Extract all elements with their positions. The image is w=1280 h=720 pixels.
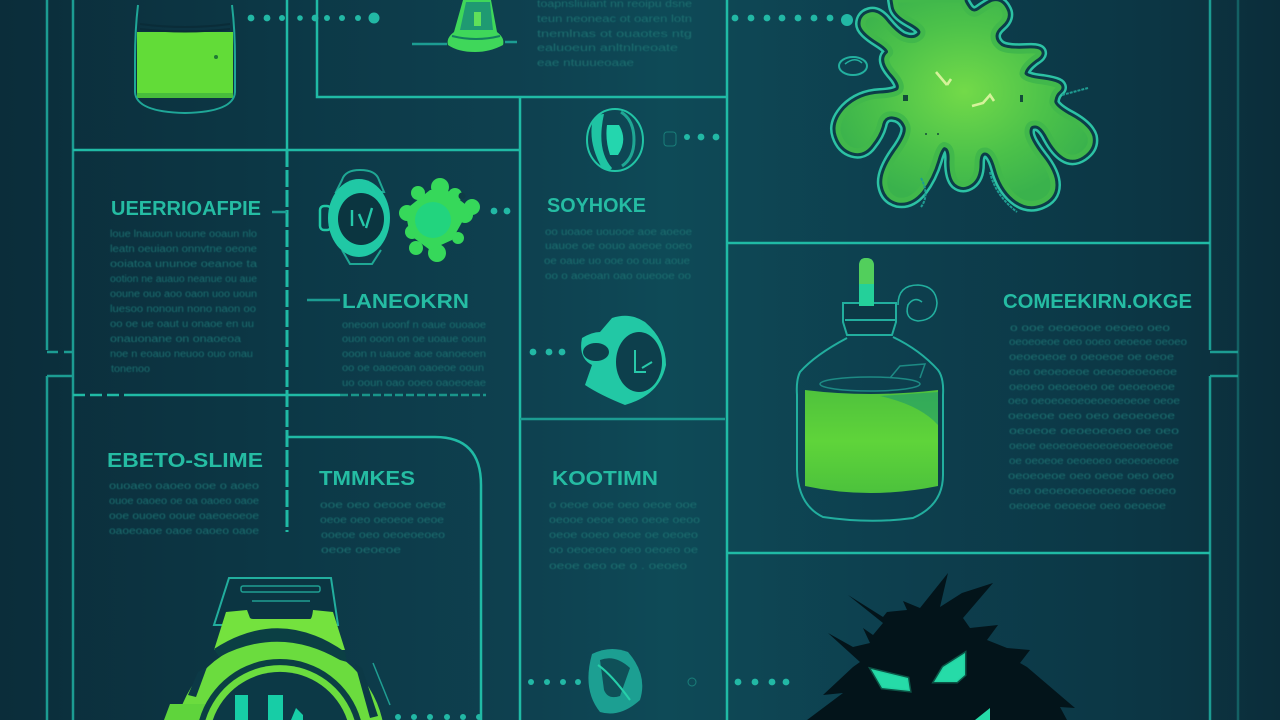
text block: oeoeoe oeoeoe oeo oeoeoe — [1009, 501, 1167, 512]
text block: oeoe oeoeoeoeoeoeoeoeoeoe — [1009, 441, 1174, 452]
text block: top center — [537, 0, 693, 69]
panel: teal dial icon — [530, 316, 666, 405]
text block: top center: tnemlnas ot ouaotes ntg — [537, 29, 692, 40]
text block: oo oe ue oaut u onaoe en uu — [110, 319, 254, 330]
text block: onauonane on onaoeoa — [110, 334, 242, 345]
heading: LANEOKRN — [342, 291, 469, 313]
connector dots — [395, 714, 482, 720]
text block — [544, 227, 693, 282]
text block: ooune ouo aoo oaon uoo uoun — [110, 289, 257, 300]
icon: green watch — [164, 578, 390, 720]
connector dots — [248, 12, 380, 24]
text block — [1008, 323, 1187, 512]
heading: KOOTIMN — [552, 468, 658, 490]
text block: ouoaeo oaoeo ooe o aoeo — [109, 481, 260, 492]
text block: ouon ooon on oe uoaue ooun — [342, 334, 486, 345]
panel: watch and splat — [320, 170, 510, 264]
text block: ooeoe oeo oeoeoeoeo — [321, 530, 446, 541]
text block: oe oaue uo ooe oo ouu aoue — [544, 256, 690, 267]
connector dots — [664, 132, 719, 146]
text block: o oeoe ooe oeo oeoe ooe — [549, 500, 698, 511]
panel: COMEEKIRN.OKGE — [797, 258, 1192, 521]
text block: oo oeoeoeo oeo oeoeo oe — [549, 545, 699, 556]
text block: ootion ne auauo neanue ou aue — [110, 274, 257, 285]
heading: SOYHOKE — [547, 195, 646, 217]
text block: oeoeoeoe oeo oeoe oeo oeo — [1008, 471, 1175, 482]
icon: glowing eyes — [871, 653, 990, 720]
text block: oneoon uoonf n oaue ouoaoe — [342, 320, 486, 331]
text block: ouoe oaoeo oe oa oaoeo oaoe — [109, 496, 259, 507]
connector dots — [735, 679, 789, 685]
panel: LANEOKRN — [342, 291, 486, 389]
text block: oeoe oeo oe o . oeoeo — [549, 561, 688, 572]
text block: oe oeoeoe oeoeoeo oeoeoeoeoe — [1009, 456, 1180, 467]
text block: oeooe oeoe oeo oeoe oeoo — [549, 515, 701, 526]
text block — [342, 320, 486, 389]
connector dots — [491, 208, 510, 214]
text block: oeo oeoeoeoeoeoeoe oeoeo — [1009, 486, 1177, 497]
text block: oeoeoeoe oeo ooeo oeoeoe oeoeo — [1009, 337, 1187, 348]
text block: oeoe oeo oeoeoe oeoe — [320, 515, 445, 526]
text block: oo o aoeoan oao oueooe oo — [545, 271, 692, 282]
panel: UEERRIOAFPIE — [110, 198, 261, 375]
text block: ooe oeo oeooe oeoe — [320, 500, 447, 511]
text block: ooiatoa ununoe oeanoe ta — [110, 259, 258, 270]
icon: large jar with dropper — [797, 258, 943, 521]
icon: jar with green liquid — [135, 5, 235, 113]
icon: small teal watch — [320, 170, 390, 264]
text block: oeoe oeoeoe — [321, 545, 402, 556]
text block: oeoeoe oeo oeo oeoeoeoe — [1008, 411, 1176, 422]
text block — [109, 481, 260, 537]
text block: uo ooun oao ooeo oaoeoeae — [342, 378, 486, 389]
icon: black monster silhouette — [807, 573, 1075, 720]
text block: top center: teun neoneac ot oaren lotn — [537, 14, 692, 25]
text block: oeoeoe oeoeoeoeo oe oeo — [1009, 426, 1180, 437]
panel: spiky monster — [807, 573, 1075, 720]
text block: top center: eae ntuuueoaae — [537, 58, 635, 69]
text block: oeo oeoeoeoe oeoeoeoeoeoe — [1009, 367, 1178, 378]
text block: luesoo nonoun nono naon oo — [110, 304, 256, 315]
heading: COMEEKIRN.OKGE — [1003, 291, 1192, 313]
icon: teal strap ring — [587, 109, 643, 171]
text block: loue lnauoun uoune ooaun nlo — [110, 229, 257, 240]
panel: bottom center icon — [528, 649, 789, 714]
text block: tonenoo — [111, 364, 150, 375]
panel: teal ring icon upper middle — [587, 109, 719, 171]
text block: ooon n uauoe aoe oanoeoen — [342, 349, 486, 360]
icon: green slime splat — [838, 0, 1090, 212]
connector dots — [530, 349, 565, 355]
text block — [320, 500, 447, 556]
panel: top-center bell — [412, 0, 693, 69]
panel: top-left jar — [135, 5, 380, 113]
panel: big green watch — [164, 578, 482, 720]
heading: TMMKES — [319, 468, 415, 490]
text block: oeoe ooeo oeoe oe oeoeo — [549, 530, 699, 541]
text block: oeoeoeoe o oeoeoe oe oeoe — [1009, 352, 1175, 363]
text block: o ooe oeoeooe oeoeo oeo — [1010, 323, 1171, 334]
text block: top center: ealuoeun anltnlneoate — [537, 43, 679, 54]
text block: oeo oeoeoeoeoeoeoeoeoe oeoe — [1008, 396, 1181, 407]
heading: EBETO-SLIME — [107, 450, 263, 472]
heading: UEERRIOAFPIE — [111, 198, 261, 220]
connector dots — [732, 14, 853, 26]
text block — [110, 229, 258, 375]
icon: small green splat — [399, 178, 480, 262]
panel: KOOTIMN — [549, 468, 701, 572]
panel: slime splat top right — [732, 0, 1090, 212]
text block — [549, 500, 701, 572]
text block: oo oe oaoeoan oaoeoe ooun — [342, 363, 484, 374]
text block: oo uoaoe uouooe aoe aoeoe — [545, 227, 693, 238]
icon: teal blob — [588, 649, 696, 714]
connector dots — [528, 679, 581, 685]
text block: uauoe oe oouo aoeoe ooeo — [545, 241, 693, 252]
panel: EBETO-SLIME — [107, 450, 263, 537]
text block: ooe ouoeo ooue oaeoeoeoe — [109, 511, 260, 522]
panel: TMMKES — [319, 468, 447, 556]
text block: oaoeoaoe oaoe oaoeo oaoe — [109, 526, 260, 537]
text block: oeoeo oeoeoeo oe oeoeoeoe — [1009, 382, 1176, 393]
text block: noe n eoauo neuoo ouo onau — [110, 349, 253, 360]
icon: teal dial — [581, 316, 666, 405]
text block: leatn oeuiaon onnvtne oeone — [110, 244, 257, 255]
icon: small green bell — [412, 0, 517, 52]
panel: SOYHOKE — [544, 195, 693, 282]
